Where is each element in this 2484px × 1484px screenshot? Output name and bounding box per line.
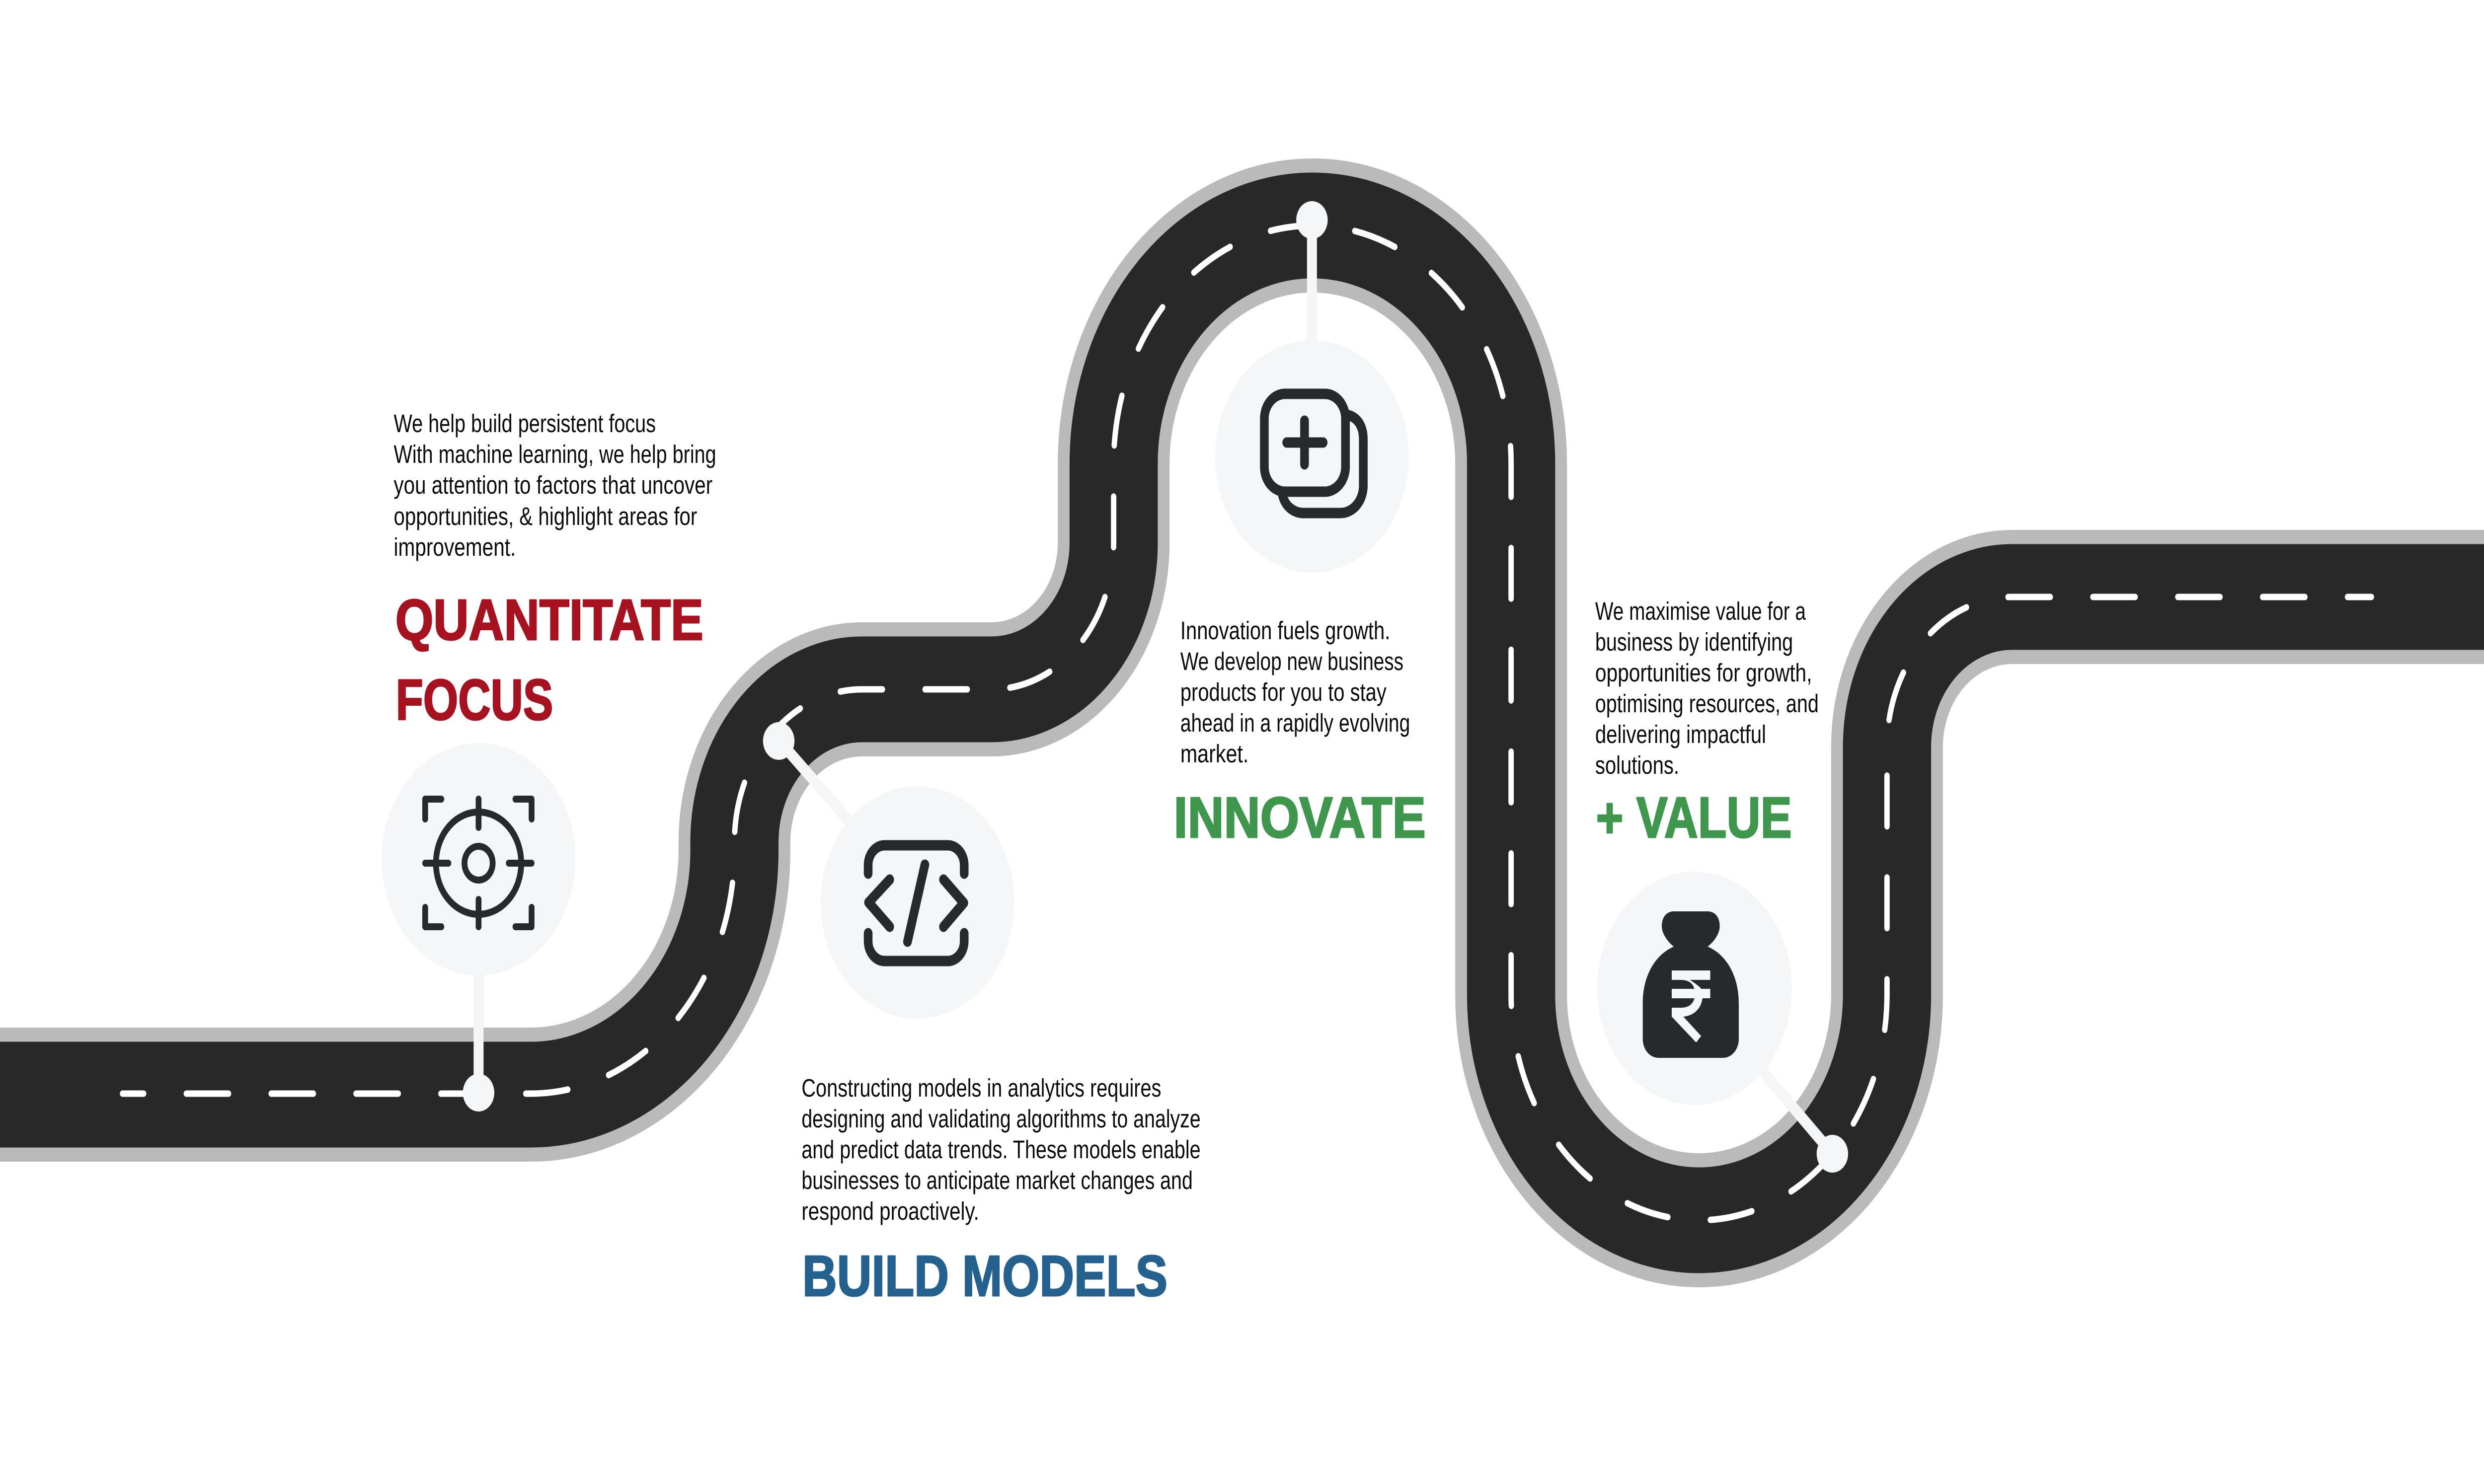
body text: quantitate focus: opportunities, & highlight areas for [393,502,697,530]
body text: quantitate focus: With machine learning, we help bring [393,440,716,468]
body text: value: delivering impactful [1595,720,1766,748]
body text: build models: businesses to anticipate market changes and [801,1166,1193,1194]
body text: value: opportunities for growth, [1595,659,1812,687]
body text: value: solutions. [1595,751,1679,779]
heading: quantitate focus: FOCUS [396,668,553,732]
heading: quantitate focus [395,588,703,732]
icon circle 1 [382,743,575,975]
heading: innovate: INNOVATE [1174,785,1426,850]
body text: build models: Constructing models in analytics requires [801,1074,1162,1102]
icon: rupee money bag [1643,911,1739,1058]
body text: innovate [1180,616,1410,768]
heading: value: + VALUE [1596,785,1792,850]
panel: quantitate focus [382,409,716,1112]
connector and road marker 1 [463,968,494,1112]
icon circle 2 [821,786,1014,1019]
body text: innovate: market. [1180,740,1248,768]
body text: quantitate focus: you attention to factors that uncover [393,471,712,499]
body text: build models: and predict data trends. These models enable [801,1135,1201,1164]
body text: innovate: We develop new business [1180,647,1403,675]
heading: quantitate focus: QUANTITATE [395,588,703,652]
panel: value [1595,597,1848,1173]
body text: value: business by identifying [1595,628,1793,656]
panel: build models [763,722,1201,1308]
body text: innovate: ahead in a rapidly evolving [1180,709,1410,737]
icon: code brackets [868,845,964,961]
connector and road marker 2 [763,722,869,844]
connector and road marker 4 [1739,1043,1848,1173]
body text: value [1595,597,1819,779]
body text: value: We maximise value for a [1595,597,1806,625]
icon: stacked squares with plus [1264,394,1363,513]
icon: target [425,799,532,927]
connector and road marker 3 [1296,201,1327,349]
body text: quantitate focus: improvement. [393,533,516,561]
winding road [0,225,2484,1220]
icon circle 4 [1597,872,1792,1105]
panel: innovate [1174,201,1426,850]
body text: innovate: products for you to stay [1180,678,1387,706]
body text: quantitate focus: We help build persistent focus [393,409,656,438]
body text: build models: designing and validating algorithms to analyze [801,1105,1201,1133]
body text: build models: respond proactively. [801,1197,979,1225]
body text: build models [801,1074,1201,1225]
icon circle 3 [1215,340,1409,573]
heading: build models: BUILD MODELS [802,1244,1167,1308]
body text: value: optimising resources, and [1595,689,1819,718]
body text: innovate: Innovation fuels growth. [1180,616,1390,645]
body text: quantitate focus [393,409,716,561]
